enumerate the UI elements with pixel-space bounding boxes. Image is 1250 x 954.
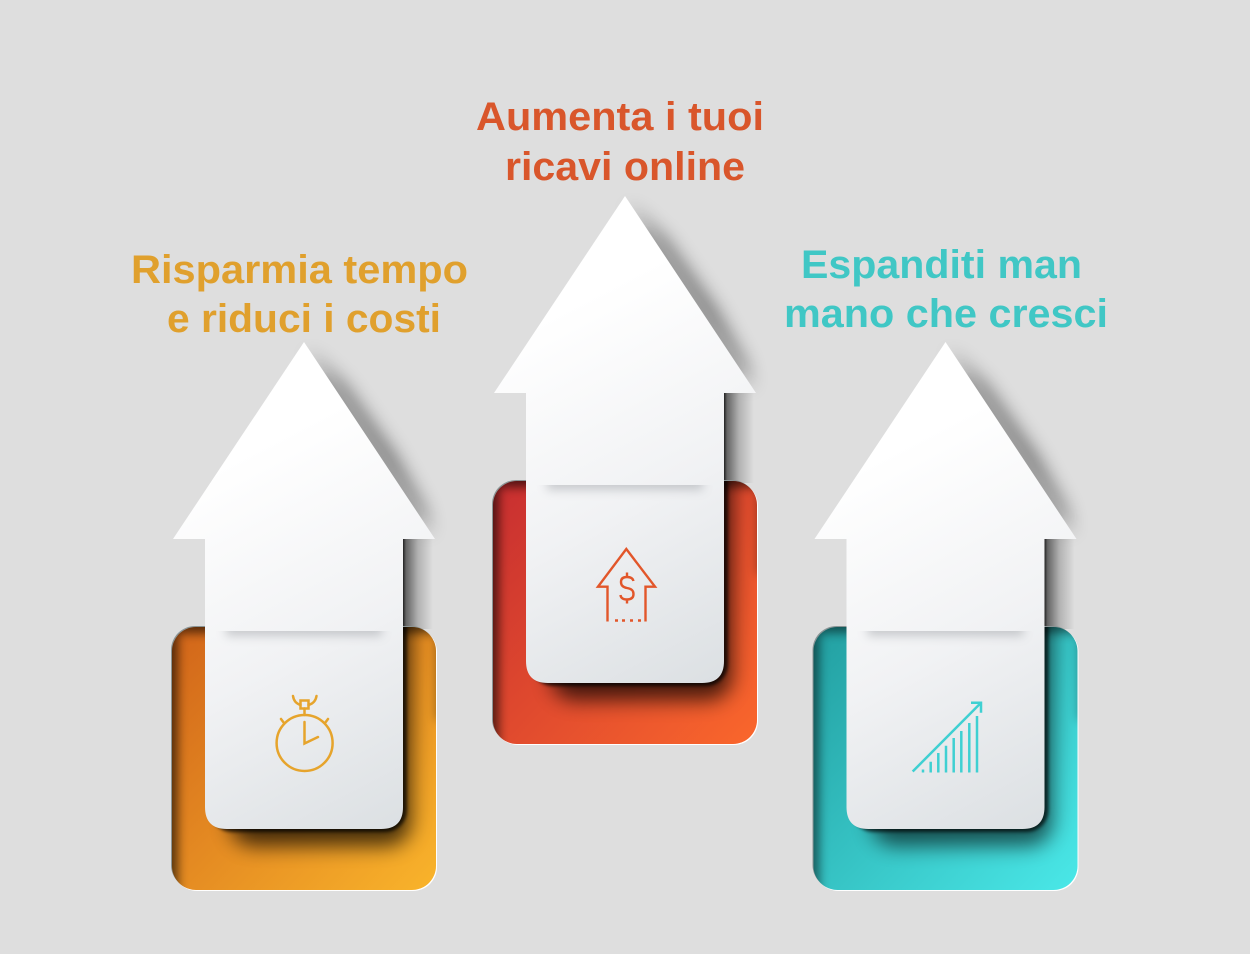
- white arrow card: [173, 342, 435, 829]
- recessed red square: [492, 480, 758, 745]
- icon: growth chart: [913, 703, 981, 772]
- heading: Risparmia tempo: Risparmia tempo: [131, 248, 468, 292]
- arrow shadow on background: [627, 204, 754, 483]
- white arrow card: [494, 196, 756, 683]
- arrow shadow on background: [306, 350, 433, 629]
- recessed teal square: [812, 626, 1078, 891]
- white arrow card: [814, 342, 1076, 829]
- infographic: [134, 101, 1106, 891]
- icon: stopwatch: [277, 696, 333, 771]
- fold shadow: [543, 485, 706, 494]
- heading: Risparmia tempo: e riduci i costi: [167, 297, 441, 341]
- panel: middle arrow red: [477, 101, 762, 745]
- panel: right arrow teal: [786, 249, 1106, 891]
- heading: Aumenta i tuoi: Aumenta i tuoi: [476, 95, 764, 139]
- heading: Espanditi man: [784, 243, 1108, 336]
- panel: left arrow orange: [134, 254, 466, 891]
- heading: Risparmia tempo: [131, 248, 468, 341]
- heading: Espanditi man: mano che cresci: [784, 292, 1108, 336]
- heading: Aumenta i tuoi: ricavi online: [505, 145, 745, 189]
- icon: dollar up arrow: [598, 549, 655, 622]
- heading: Aumenta i tuoi: [476, 95, 764, 189]
- recessed orange square: [171, 626, 437, 891]
- heading: Espanditi man: Espanditi man: [801, 243, 1082, 287]
- fold shadow: [864, 631, 1027, 640]
- fold shadow: [222, 631, 386, 640]
- arrow shadow on background: [948, 350, 1074, 629]
